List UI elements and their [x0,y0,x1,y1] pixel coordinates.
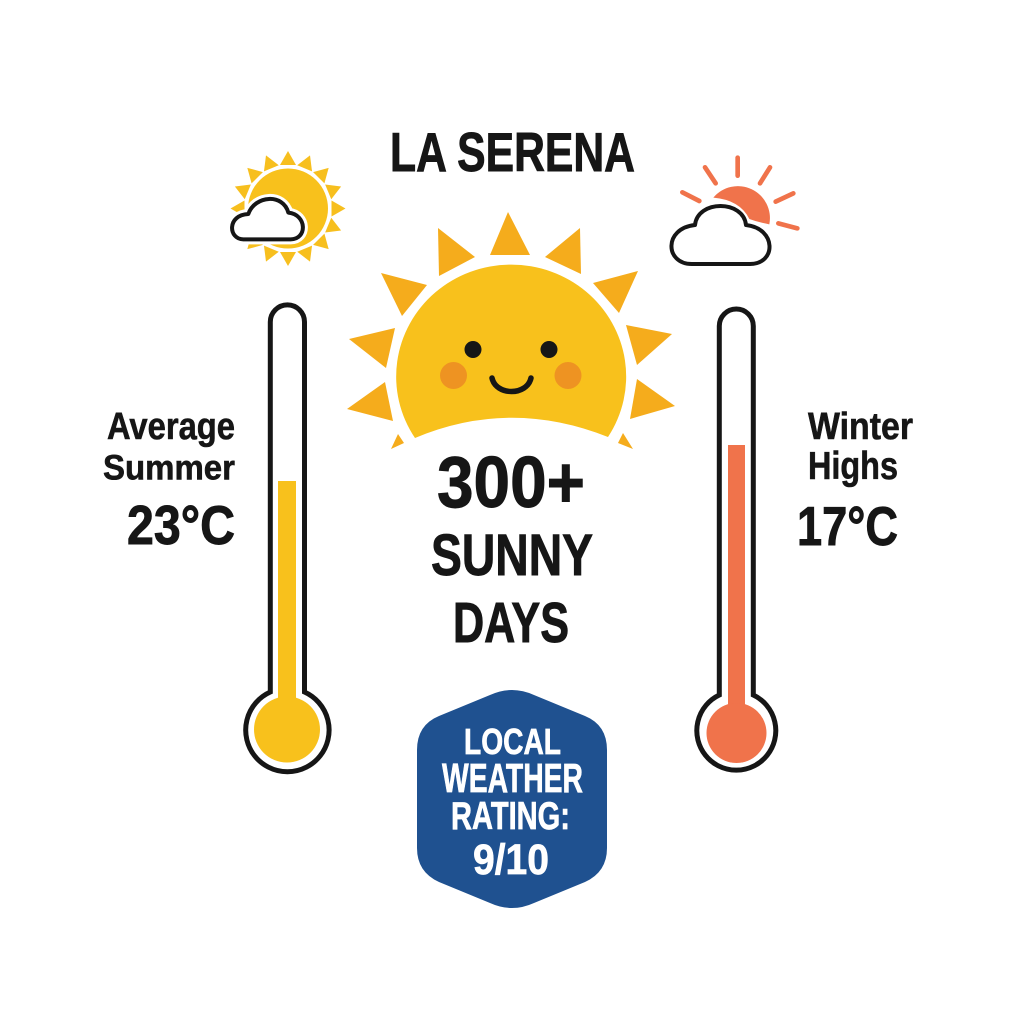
label: average summer: Average [107,406,235,448]
label: winter highs: Winter [808,406,913,448]
value: 23°C: 23°C [127,494,235,556]
label: winter highs [808,406,913,488]
thermometer: winter [697,309,776,770]
headline: 300+ sunny days: SUNNY [431,523,593,588]
sun rays [347,212,675,449]
sun body [396,265,626,438]
headline: 300+ sunny days: 300+ [437,443,585,523]
badge: local weather rating: RATING: [451,795,570,838]
value: 17°C: 17°C [797,495,898,557]
headline: 300+ sunny days: DAYS [453,591,569,655]
label: average summer [103,406,235,488]
badge: local weather rating: LOCAL [464,721,561,762]
icon: orange sun with cloud [671,158,797,264]
sun face [440,341,582,392]
icon: small sun with cloud [230,151,346,266]
label: average summer: Summer [103,448,235,488]
badge: local weather rating: WEATHER [442,755,583,801]
thermometer: summer [246,305,329,772]
icon: large smiling sun [347,212,675,449]
label: winter highs: Highs [808,445,898,488]
badge: local weather rating: 9/10 [473,836,549,884]
headline: 300+ sunny days [431,443,593,655]
title: LA SERENA [390,121,635,183]
badge: local weather rating [417,690,607,908]
